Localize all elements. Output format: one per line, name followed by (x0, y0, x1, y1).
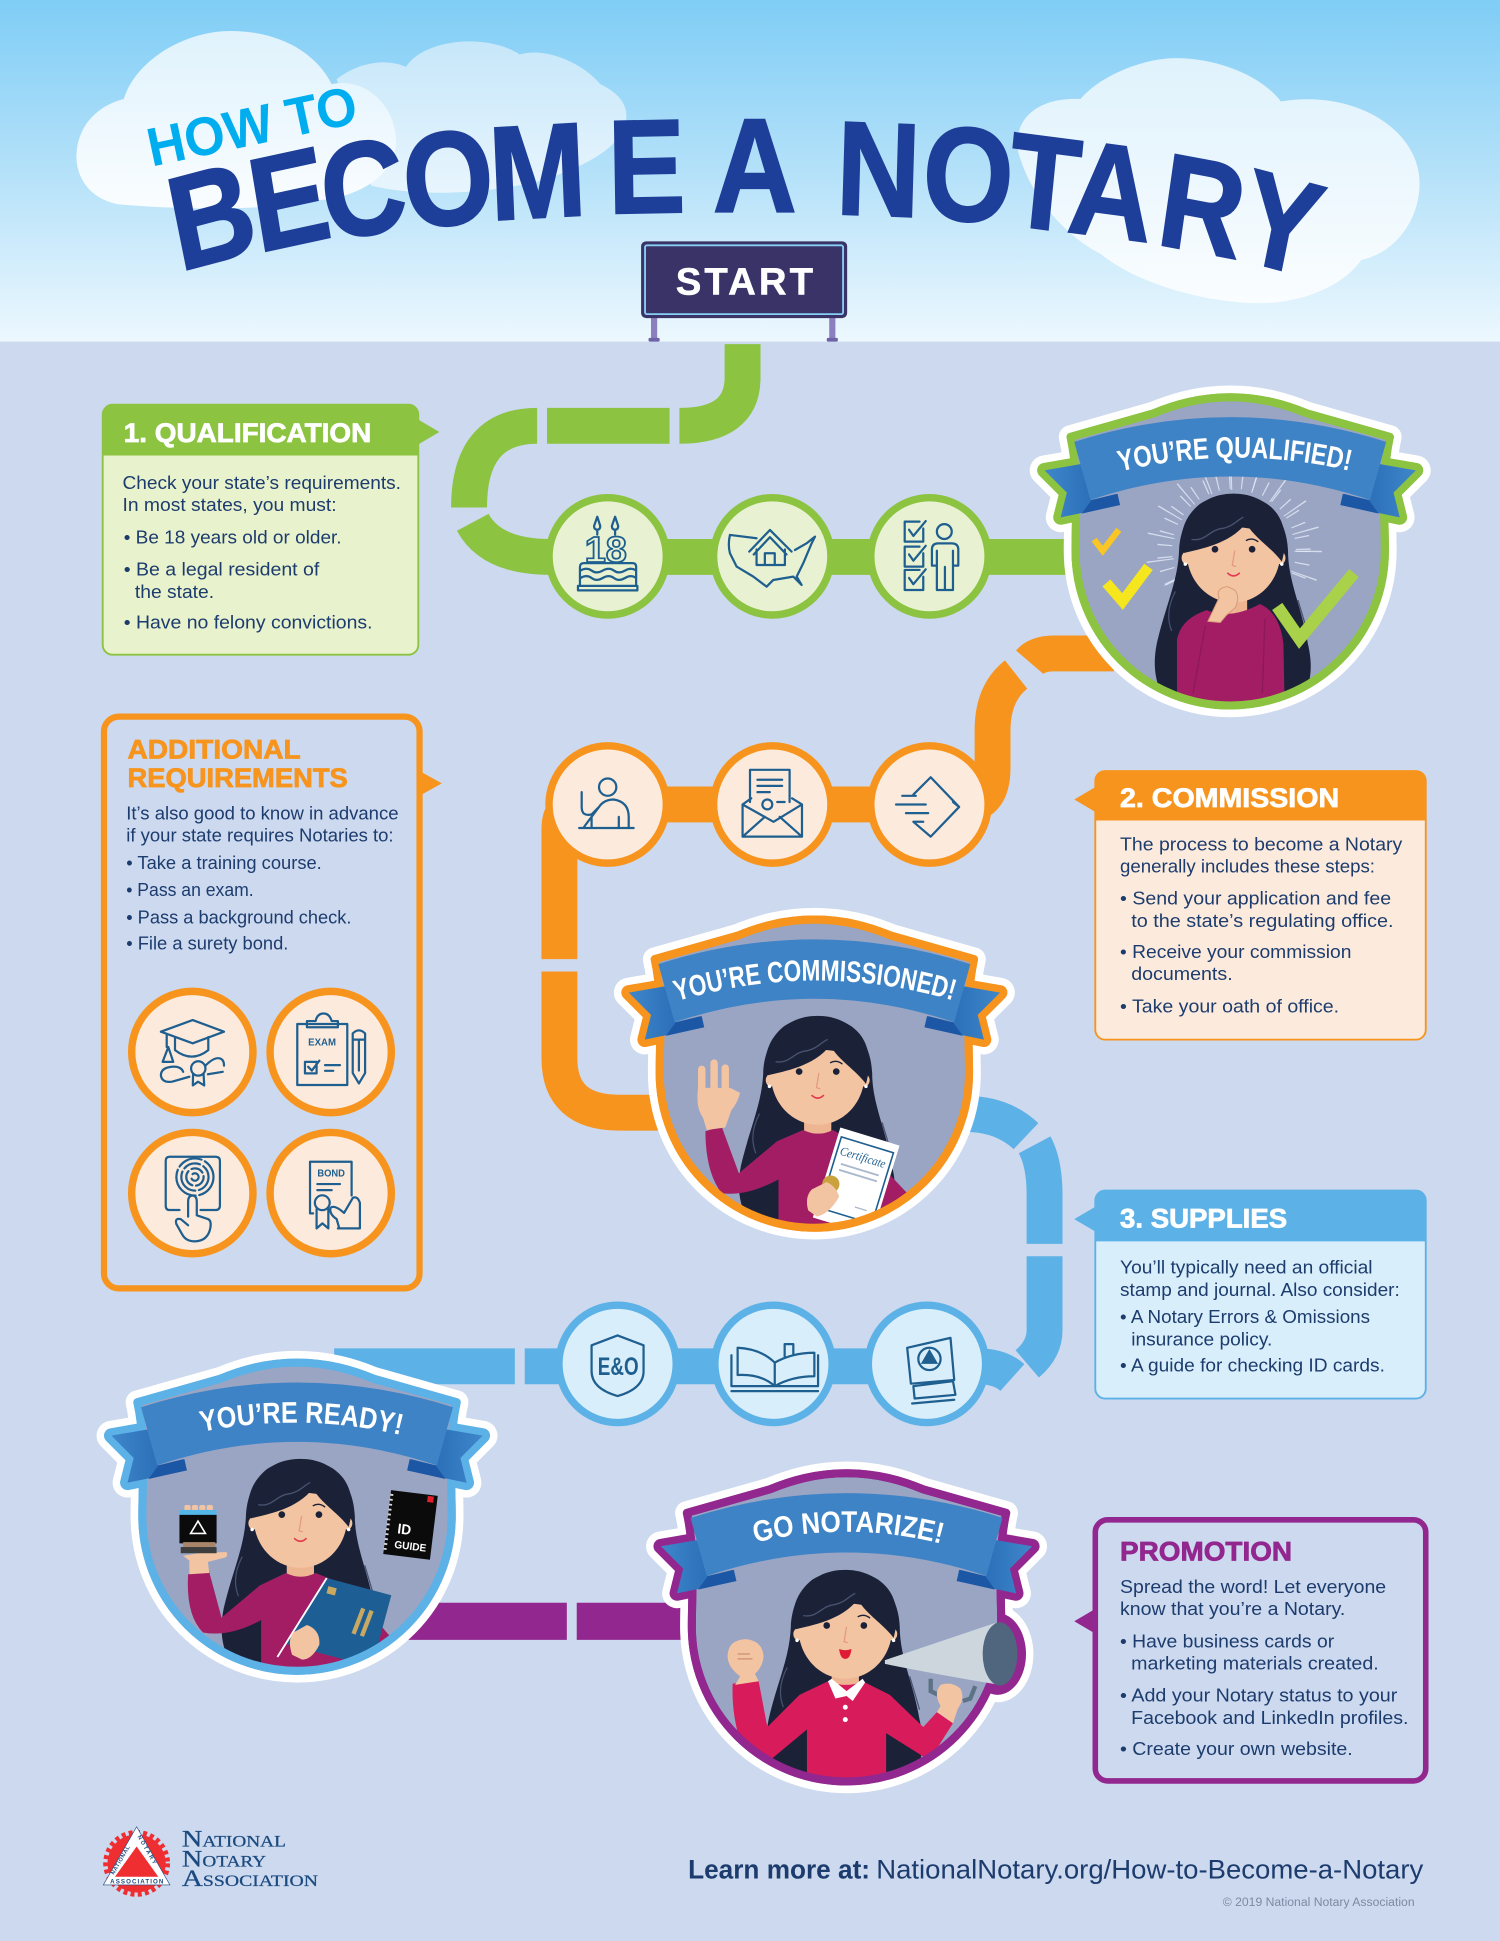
title: become a notary: M (486, 94, 589, 249)
icon: raised hand oath (549, 746, 666, 863)
icon: birthday cake: 18 (585, 530, 627, 570)
icon: e&o shield (559, 1305, 676, 1423)
logo wordmark (182, 1827, 319, 1892)
text: commission list: documents. (1131, 963, 1233, 984)
text: qualification list: the state. (135, 581, 214, 602)
ribbon text: YOU’RE QUALIFIED! (1116, 437, 1352, 470)
start sign (641, 241, 847, 342)
title: become a notary: O (397, 99, 499, 258)
text: commission list: • Send your application and fee (1120, 888, 1391, 909)
purple path (408, 1603, 688, 1640)
sky background (0, 0, 1500, 343)
title: become a notary: A (713, 91, 797, 240)
start sign: START (676, 261, 814, 304)
icon: notary stamp (868, 1305, 986, 1423)
ribbon text: GO NOTARIZE! (754, 1511, 944, 1543)
title: become a notary: Y (1229, 141, 1334, 306)
panel: qualification (103, 405, 439, 655)
icon: exam: EXAM (308, 1036, 336, 1048)
title: become a notary: N (834, 93, 923, 246)
title: become a notary: R (1151, 125, 1255, 288)
heading: supplies: 3. SUPPLIES (1120, 1203, 1287, 1234)
learn more link: Learn more at: (688, 1854, 870, 1885)
logo: national notary association: ASSOCIATION (110, 1879, 164, 1886)
text: additional list: It’s also good to know in advance (126, 802, 399, 823)
text: supplies list: • A Notary Errors & Omissions (1120, 1306, 1370, 1327)
text: commission list: generally includes these steps: (1120, 856, 1375, 877)
text: qualification list: • Be 18 years old or older. (124, 526, 342, 547)
icon: bond (270, 1132, 391, 1254)
copyright: © 2019 National Notary Association (1223, 1896, 1415, 1909)
title: become a notary: B (156, 132, 267, 300)
text: additional list: • Pass a background check. (126, 906, 351, 927)
text: promotion list: Spread the word! Let everyone (1120, 1576, 1386, 1597)
text: qualification list (123, 472, 401, 633)
ribbon text: YOU’RE COMMISSIONED! (672, 960, 956, 1000)
title: become a notary (156, 91, 1334, 306)
green path (469, 344, 1077, 557)
icon: birthday cake (549, 498, 666, 615)
logo: national notary association (103, 1827, 319, 1892)
title: become a notary: E (239, 118, 339, 281)
text: additional list: if your state requires Notaries to: (126, 825, 394, 846)
title: become a notary: T (1002, 104, 1087, 262)
text: promotion list: • Have business cards or (1120, 1630, 1334, 1651)
text: promotion list: marketing materials created. (1131, 1653, 1379, 1674)
heading: qualification: 1. QUALIFICATION (124, 417, 371, 448)
title: become a notary: O (919, 97, 1018, 253)
text: additional list (126, 802, 399, 953)
title: become a notary: E (607, 91, 686, 242)
badge: you're commissioned (614, 908, 1015, 1240)
text: promotion list: • Add your Notary status to your (1120, 1685, 1397, 1706)
heading: additional requirements: ADDITIONAL (127, 734, 301, 765)
panel: supplies (1074, 1191, 1426, 1399)
logo wordmark: National (182, 1827, 286, 1853)
panel: commission (1074, 771, 1426, 1040)
text: supplies list: You’ll typically need an official (1120, 1257, 1373, 1278)
icon: journal book (715, 1305, 832, 1423)
clouds (76, 31, 1420, 303)
woman raising hand with certificate (697, 1016, 907, 1236)
text: supplies list (1120, 1257, 1400, 1375)
heading: promotion: PROMOTION (1120, 1536, 1292, 1567)
badge: you're ready (96, 1350, 498, 1683)
icon: checklist and person (871, 498, 988, 615)
text: promotion list: know that you’re a Notary. (1120, 1598, 1345, 1619)
icon: sent letter (871, 746, 988, 863)
logo: national notary association: NATIONAL (110, 1845, 132, 1876)
logo: national notary association: NOTARY (136, 1835, 157, 1866)
text: qualification list: Check your state’s requirements. (123, 472, 401, 493)
woman with megaphone (728, 1570, 975, 1788)
text: qualification list: • Have no felony convictions. (124, 612, 373, 633)
panel: additional requirements (104, 717, 442, 1288)
text: promotion list: • Create your own website. (1120, 1738, 1353, 1759)
text: promotion list (1120, 1576, 1408, 1759)
title: become a notary: C (312, 108, 414, 270)
heading: additional requirements (127, 734, 348, 793)
text: commission list (1120, 833, 1403, 1016)
badge: you're qualified (1030, 386, 1431, 718)
text: supplies list: insurance policy. (1131, 1328, 1272, 1349)
text: supplies list: stamp and journal. Also consider: (1120, 1279, 1400, 1300)
title: become a notary: A (1063, 112, 1161, 271)
logo wordmark: Notary (182, 1847, 267, 1873)
icon: us map with house (714, 498, 831, 615)
text: additional list: • Pass an exam. (126, 879, 254, 900)
text: commission list: • Take your oath of office. (1120, 995, 1339, 1016)
woman with stamp and books: ID (397, 1521, 412, 1539)
text: commission list: The process to become a Notary (1120, 833, 1403, 854)
woman with stamp and books: GUIDE (394, 1539, 427, 1555)
icon: e&o shield: E&O (598, 1354, 639, 1381)
woman with stamp and books (179, 1459, 438, 1681)
ribbon text: YOU’RE READY! (198, 1402, 403, 1434)
text: commission list: to the state’s regulating office. (1131, 910, 1394, 931)
text: supplies list: • A guide for checking ID cards. (1120, 1354, 1385, 1375)
learn more link: NationalNotary.org/How-to-Become-a-Notary (876, 1854, 1424, 1885)
text: commission list: • Receive your commission (1120, 941, 1351, 962)
megaphone (885, 1622, 1017, 1686)
text: qualification list: In most states, you must: (123, 494, 337, 515)
text: additional list: • File a surety bond. (126, 932, 288, 953)
heading: commission: 2. COMMISSION (1120, 782, 1339, 813)
blue path (334, 1114, 1045, 1377)
icon: graduation (132, 991, 253, 1113)
text: promotion list: Facebook and LinkedIn profiles. (1131, 1707, 1408, 1728)
woman thinking with checks (1094, 477, 1354, 711)
icon: bond: BOND (317, 1169, 345, 1180)
text: qualification list: • Be a legal resident of (124, 559, 320, 580)
panel: promotion (1074, 1520, 1426, 1781)
logo wordmark: Association (182, 1866, 319, 1892)
icon: envelope (714, 746, 831, 863)
text: additional list: • Take a training course. (126, 852, 322, 873)
icon: fingerprint (132, 1132, 253, 1254)
badge: go notarize (646, 1462, 1047, 1794)
icon: exam (270, 991, 391, 1113)
heading: additional requirements: REQUIREMENTS (127, 762, 348, 793)
orange path (559, 653, 1114, 1113)
title: how to: HOW TO (142, 74, 362, 178)
woman raising hand with certificate: Certificate (838, 1144, 888, 1171)
